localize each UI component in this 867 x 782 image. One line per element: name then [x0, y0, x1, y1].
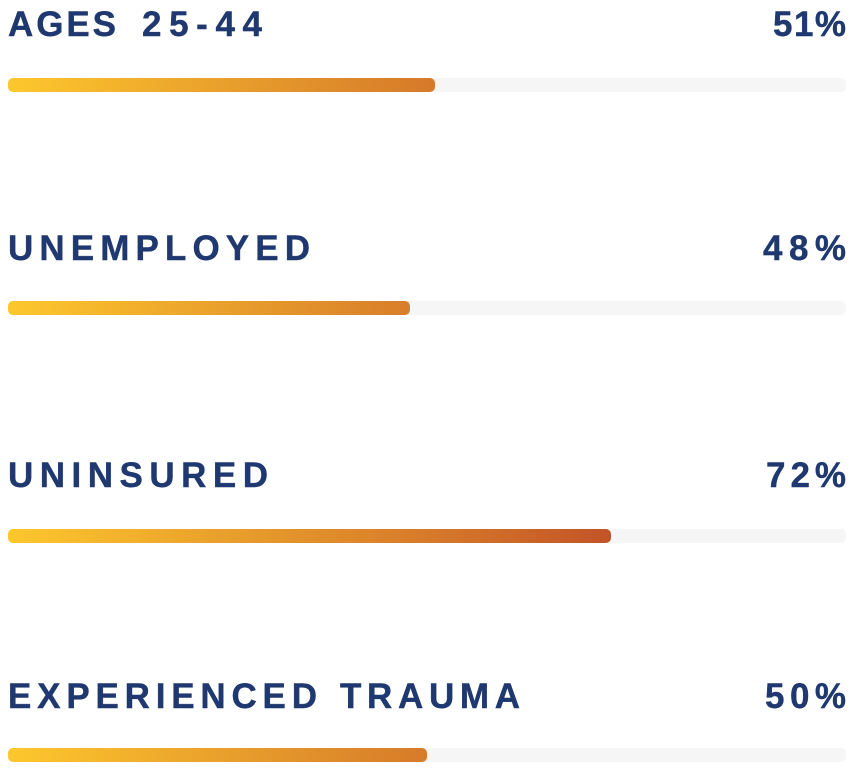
label: uninsured: UNINSURED — [8, 456, 268, 495]
bar track — [8, 301, 846, 315]
label: experienced trauma: EXPERIENCED — [8, 677, 317, 716]
label: ages 25-44: 25-44 — [142, 5, 263, 44]
label: unemployed: UNEMPLOYED — [8, 229, 310, 268]
label: ages 25-44: AGES — [8, 5, 116, 44]
label: experienced trauma: TRAUMA — [340, 677, 520, 716]
row: ages 25-44 — [8, 5, 846, 92]
bar fill: 48% — [8, 301, 410, 315]
row: experienced trauma — [8, 677, 846, 762]
value: 50%: 50% — [765, 677, 846, 716]
bar fill: 50% — [8, 748, 427, 762]
bar fill: 51% — [8, 78, 435, 92]
value: 51%: 51% — [773, 5, 846, 44]
row: unemployed — [8, 229, 846, 315]
bar track — [8, 529, 846, 543]
value: 48%: 48% — [763, 229, 846, 268]
bar fill: 72% — [8, 529, 611, 543]
bar track — [8, 78, 846, 92]
value: 72%: 72% — [766, 456, 846, 495]
bar track — [8, 748, 846, 762]
row: uninsured — [8, 456, 846, 543]
